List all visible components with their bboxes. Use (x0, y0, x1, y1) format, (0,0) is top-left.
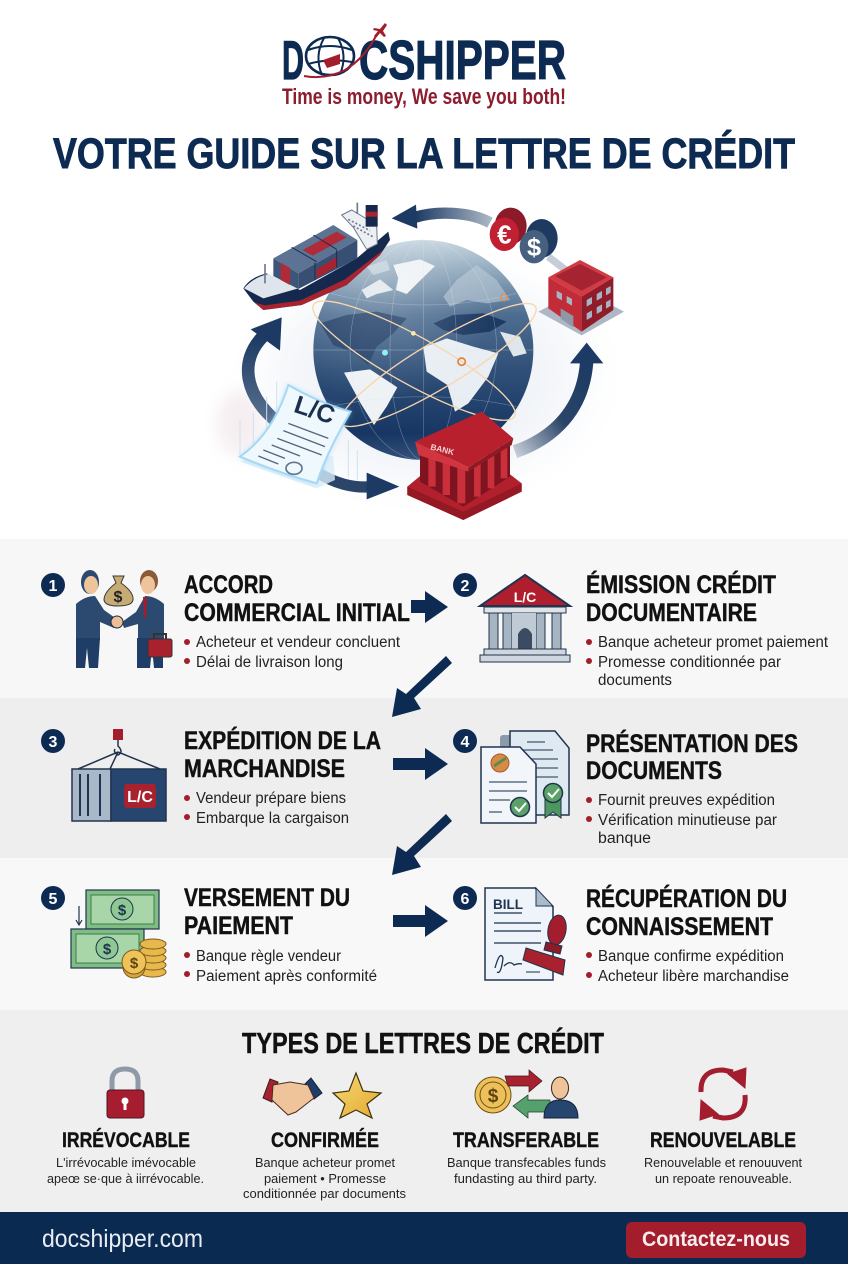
arrow: step 5 to 6 (393, 905, 448, 937)
step bullets: Délai de livraison long (196, 654, 343, 671)
footer url: docshipper.com (42, 1225, 203, 1253)
icon: red building (538, 260, 624, 335)
step bullets (586, 792, 777, 847)
step bullets (184, 948, 377, 985)
step bullets (184, 634, 401, 671)
step heading: CONNAISSEMENT (586, 913, 773, 941)
icon: handshake and star (263, 1073, 381, 1118)
type: irrévocable: L'irrévocable imévocable (56, 1155, 196, 1170)
arrow: step 3 to 4 (393, 748, 448, 780)
badge 3 (41, 729, 65, 753)
badge 1 (41, 573, 65, 597)
step heading: ACCORD (184, 571, 273, 599)
badge 2: 2 (461, 578, 470, 595)
step bullets: documents (598, 672, 672, 689)
type: transferable: TRANSFERABLE (453, 1129, 599, 1152)
icon: verified documents (481, 731, 569, 823)
logo: CSHIPPER (359, 29, 566, 91)
step 3 (41, 726, 381, 827)
type: transferable (447, 1070, 606, 1186)
arrow: step 4 to 5 (392, 814, 452, 875)
icon: currency coins: $ (527, 234, 541, 262)
type: confirmée: conditionnée par documents (243, 1186, 406, 1201)
step 4 (453, 729, 798, 847)
type: irrévocable (47, 1069, 204, 1186)
step bullets: Vérification minutieuse par (598, 812, 777, 829)
step bullets (586, 634, 829, 689)
step bullets: Acheteur et vendeur concluent (196, 634, 401, 651)
icon: bill and stamp (485, 888, 568, 980)
step heading: PAIEMENT (184, 912, 293, 940)
step heading (586, 884, 787, 941)
badge 5 (41, 886, 65, 910)
step 2 (453, 570, 829, 689)
icon: bank: BANK (430, 442, 455, 457)
step bullets: Banque règle vendeur (196, 948, 341, 965)
type: transferable: Banque transfecables funds (447, 1155, 606, 1170)
icon: L/C document: L/C (291, 391, 338, 430)
logo: Time is money, We save you both! (282, 84, 566, 109)
panel: step band 2 (0, 698, 848, 858)
icon: bank with L/C: L/C (514, 589, 536, 605)
type: renouvelable (644, 1068, 802, 1186)
logo (282, 23, 566, 109)
step heading: DOCUMENTAIRE (586, 599, 757, 627)
step heading (184, 726, 381, 783)
arrow: step 1 to 2 (411, 591, 448, 623)
icon: currency coins (490, 208, 570, 273)
step bullets (184, 790, 349, 827)
icon: container on hook (72, 729, 166, 821)
step bullets: Acheteur libère marchandise (598, 968, 789, 985)
type: irrévocable: apeœ se·que à iirrévocable. (47, 1171, 204, 1186)
step bullets: Promesse conditionnée par (598, 654, 781, 671)
type: renouvelable: un repoate renouveable. (655, 1171, 792, 1186)
step bullets: Banque confirme expédition (598, 948, 784, 965)
type: renouvelable: Renouvelable et renouuvent (644, 1155, 802, 1170)
icon: money and coins: $ (103, 941, 112, 958)
icon: currency coins: € (497, 219, 512, 249)
panel: step band 3 (0, 858, 848, 1010)
type: irrévocable: IRRÉVOCABLE (62, 1129, 190, 1152)
icon: money and coins (71, 890, 166, 978)
contact button: Contactez-nous (642, 1228, 790, 1251)
step heading: VERSEMENT DU (184, 884, 350, 912)
icon: handshake people (76, 570, 172, 668)
step heading: RÉCUPÉRATION DU (586, 884, 787, 913)
step heading: MARCHANDISE (184, 755, 345, 783)
arrow: ship to coins (392, 205, 490, 229)
icon: globe (302, 240, 547, 460)
icon: renewal arrows (700, 1068, 746, 1120)
step bullets: Paiement après conformité (196, 968, 377, 985)
icon: coin, arrows and person (475, 1070, 578, 1118)
step bullets: Embarque la cargaison (196, 810, 349, 827)
icon: money and coins: $ (130, 955, 139, 972)
icon: L/C document (240, 382, 357, 488)
arrow: step 2 to 3 (392, 656, 452, 717)
icon: coin, arrows and person: $ (488, 1086, 499, 1107)
panel: types band (0, 1010, 848, 1212)
step heading (184, 571, 410, 627)
badge 5: 5 (49, 891, 58, 908)
step 6 (453, 884, 789, 985)
step heading: EXPÉDITION DE LA (184, 726, 381, 755)
badge 6: 6 (461, 891, 470, 908)
arrow: document to ship (248, 317, 282, 422)
footer (0, 1212, 848, 1264)
icon: cargo ship (243, 203, 390, 310)
hero illustration (217, 203, 633, 520)
step bullets (586, 948, 789, 985)
badge 1: 1 (49, 578, 58, 595)
icon: bank with L/C (480, 575, 570, 662)
icon: bank (407, 412, 522, 520)
badge 4: 4 (461, 734, 470, 751)
step 1 (41, 570, 410, 671)
type: confirmée (243, 1073, 406, 1201)
step heading (184, 884, 350, 940)
step heading: COMMERCIAL INITIAL (184, 599, 410, 627)
step heading: ÉMISSION CRÉDIT (586, 570, 776, 599)
icon: bill and stamp: BILL (493, 896, 523, 912)
arrow: bank to building (515, 343, 603, 452)
icon: handshake people: $ (114, 589, 123, 606)
badge 4 (453, 729, 477, 753)
types heading: TYPES DE LETTRES DE CRÉDIT (242, 1026, 604, 1060)
icon: container on hook: L/C (127, 789, 153, 806)
type: transferable: fundasting au third party. (454, 1171, 597, 1186)
step 5 (41, 884, 377, 985)
contact button (626, 1222, 806, 1258)
step bullets: Vendeur prépare biens (196, 790, 346, 807)
type: confirmée: CONFIRMÉE (271, 1129, 379, 1152)
icon: padlock (107, 1069, 144, 1118)
logo: D (282, 29, 304, 91)
icon: money and coins: $ (118, 902, 127, 919)
type: renouvelable: RENOUVELABLE (650, 1129, 796, 1152)
badge 6 (453, 886, 477, 910)
step bullets: Fournit preuves expédition (598, 792, 775, 809)
step heading: DOCUMENTS (586, 757, 722, 785)
type: confirmée: paiement • Promesse (264, 1171, 386, 1186)
panel: step band 1 (0, 539, 848, 698)
step heading (586, 729, 798, 785)
arrow: document to bank (317, 472, 399, 499)
step heading: PRÉSENTATION DES (586, 729, 798, 758)
step bullets: Banque acheteur promet paiement (598, 634, 829, 651)
badge 3: 3 (49, 734, 58, 751)
badge 2 (453, 573, 477, 597)
type: confirmée: Banque acheteur promet (255, 1155, 395, 1170)
step heading (586, 570, 776, 627)
step bullets: banque (598, 830, 651, 847)
